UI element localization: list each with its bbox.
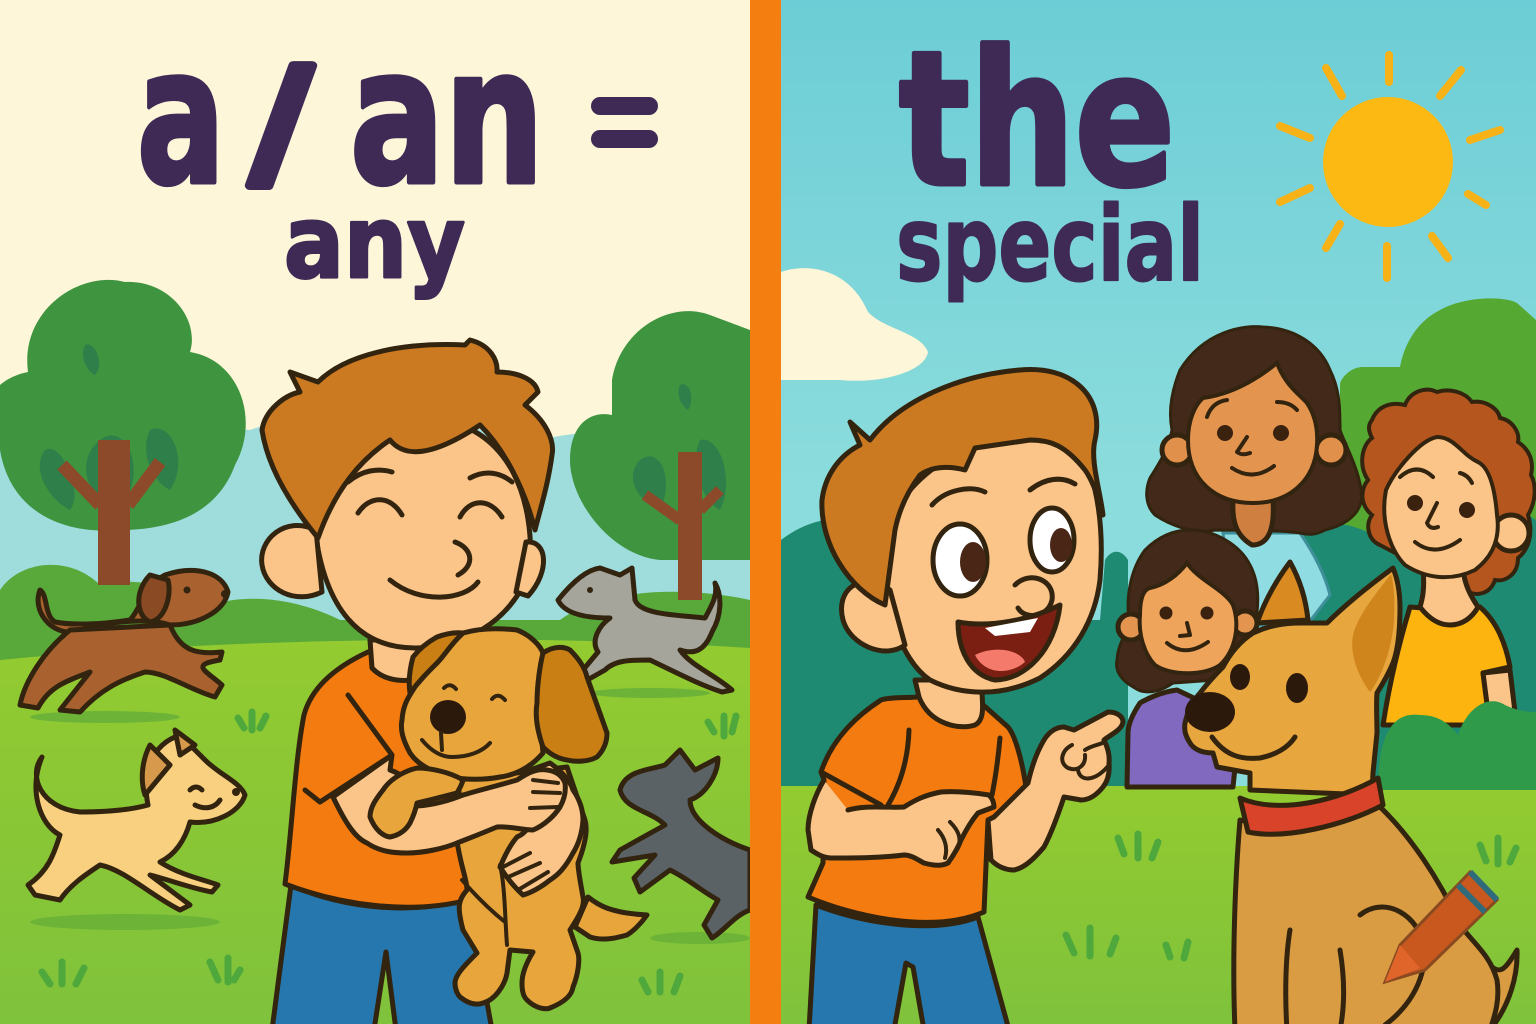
boy closed eyes and smile	[348, 470, 512, 597]
puppy head	[401, 629, 543, 779]
shirt	[1127, 690, 1240, 787]
boy nose and mouth	[1015, 578, 1052, 616]
puppy paw	[370, 768, 463, 837]
teal trees background	[781, 503, 1536, 790]
dog body	[1234, 805, 1498, 1024]
left hedge background	[0, 565, 750, 680]
girl with long dark hair	[1147, 327, 1362, 625]
boy shirt	[285, 652, 475, 907]
boy hugging fingers	[530, 780, 560, 808]
right front bush	[1378, 701, 1536, 790]
boy pointing arm	[988, 712, 1123, 870]
dog with red collar	[1185, 562, 1517, 1024]
face	[1188, 363, 1317, 503]
dog back ear	[1257, 562, 1308, 623]
small girl in purple	[1117, 530, 1258, 787]
arm	[1483, 670, 1515, 725]
dog head	[1185, 568, 1400, 795]
neck	[1420, 570, 1478, 625]
boy folded arm	[808, 780, 994, 865]
boy hair	[822, 369, 1103, 605]
brown dog	[20, 570, 229, 712]
panel: a/an any	[0, 0, 750, 1024]
ear	[1493, 515, 1529, 551]
face	[1140, 563, 1236, 673]
girl with curly red hair	[1362, 390, 1535, 725]
title: a/an: /	[250, 37, 313, 207]
dog face	[1185, 664, 1308, 758]
red collar	[1240, 778, 1383, 834]
boy hugging puppy	[262, 340, 647, 1024]
ears	[1162, 435, 1192, 465]
left tree one	[0, 280, 246, 585]
crayon icon	[1385, 872, 1497, 982]
panel: the special	[781, 0, 1536, 1024]
subtitle: any: any	[284, 184, 465, 301]
dog tail	[1450, 950, 1517, 1024]
boy eyes	[932, 479, 1075, 596]
right meadow	[781, 786, 1536, 1024]
hair	[1117, 530, 1258, 692]
ears	[1118, 614, 1144, 640]
boy lower hand	[500, 763, 583, 895]
left tree two	[570, 311, 750, 600]
equals sign	[591, 97, 658, 148]
dark dog	[612, 750, 750, 938]
boy sleeve lines	[821, 730, 1000, 805]
boy shirt	[808, 697, 1026, 922]
boy hair	[262, 340, 553, 538]
subtitle: special: special	[896, 185, 1204, 305]
puppy left ear	[409, 633, 463, 693]
boy head	[315, 420, 531, 648]
boy curled fingers	[1062, 742, 1109, 778]
left meadow	[0, 639, 750, 1024]
grass tufts	[42, 712, 736, 992]
shirt	[1383, 607, 1510, 725]
cloud	[781, 268, 928, 381]
green trees background	[1340, 298, 1536, 560]
title: a/an: an	[350, 8, 544, 227]
sun	[1280, 55, 1500, 278]
cream dog	[28, 730, 245, 910]
grass shadows	[30, 688, 750, 944]
neck	[1233, 500, 1273, 545]
left distant sky band	[0, 419, 750, 650]
puppy right ear	[536, 647, 607, 761]
right grass tufts	[1066, 834, 1516, 958]
dog front ear shading	[1352, 574, 1394, 692]
boy neck	[915, 680, 983, 727]
puppy face	[422, 685, 505, 757]
puppy body and legs	[455, 767, 586, 1009]
shirt	[1223, 533, 1330, 625]
curly hair	[1362, 390, 1535, 594]
title: a/an	[137, 8, 544, 227]
orange divider	[750, 0, 781, 1024]
title: the: the	[899, 11, 1175, 228]
title: a/an: a	[137, 8, 225, 227]
boy jeans	[809, 905, 1009, 1024]
boy neck	[370, 640, 440, 680]
boy pointing	[808, 369, 1123, 1024]
puppy tail	[575, 897, 647, 939]
boy jeans	[272, 885, 492, 1024]
hair	[1147, 327, 1362, 534]
boy arm hugging	[333, 755, 565, 853]
boy sleeve line	[305, 695, 392, 802]
boy head	[884, 430, 1101, 692]
face	[1384, 437, 1498, 577]
gray dog	[558, 568, 732, 692]
